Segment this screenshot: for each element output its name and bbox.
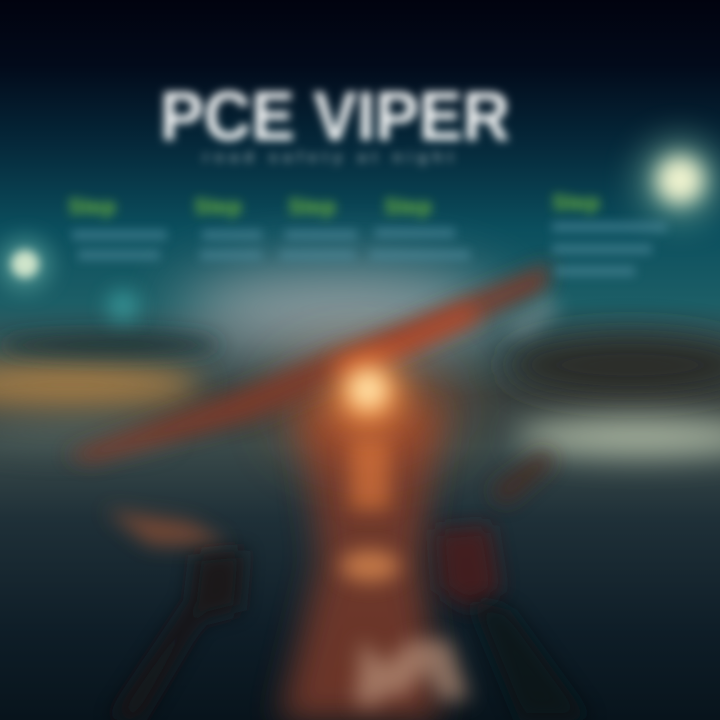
horizon band: dark right hills bbox=[505, 333, 720, 397]
horizon band: left sand bbox=[0, 359, 200, 411]
column headings: Step bbox=[384, 194, 432, 219]
column headings: Step bbox=[68, 194, 116, 219]
column headings bbox=[68, 190, 600, 219]
title: PCE VIPER bbox=[160, 77, 510, 155]
diagonal red streak bbox=[65, 262, 552, 462]
sun glow on the road bbox=[334, 358, 402, 426]
column headings: Step bbox=[552, 190, 600, 215]
lower orange patch bbox=[340, 550, 400, 582]
small teal light bbox=[107, 290, 139, 322]
column headings: Step bbox=[194, 194, 242, 219]
lower figure left bbox=[110, 550, 245, 720]
road highlight right bbox=[515, 418, 720, 456]
lower figure right bbox=[435, 450, 590, 720]
road highlight left bbox=[0, 418, 170, 446]
horizon band: dark left hills bbox=[0, 334, 220, 356]
light wedge under right end of streak bbox=[500, 295, 560, 335]
pale glow above horizon bbox=[180, 270, 500, 350]
orange reflection on road bbox=[280, 410, 440, 720]
column headings: Step bbox=[288, 194, 336, 219]
central orange glow bbox=[288, 365, 448, 455]
subtitle: road safety at night bbox=[203, 149, 453, 166]
road symbol at the bottom bbox=[355, 640, 470, 705]
column text blocks bbox=[72, 222, 667, 276]
small moon, left bbox=[0, 236, 53, 292]
moon, upper right bbox=[636, 136, 720, 224]
reflection stripe bbox=[350, 440, 390, 510]
left orange smear bbox=[105, 510, 230, 545]
